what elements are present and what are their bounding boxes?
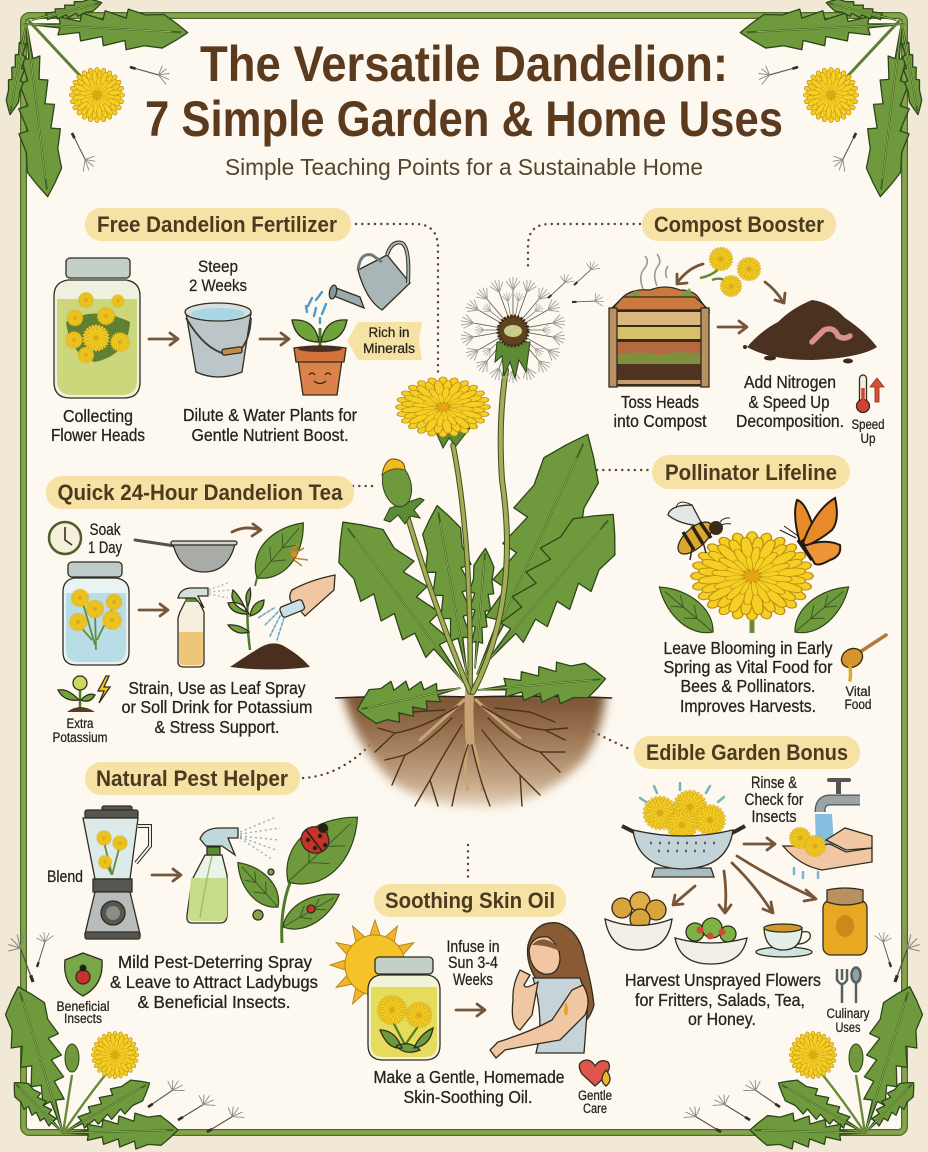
label: vital food: Vital — [846, 684, 870, 699]
heading pill: Pollinator Lifeline — [665, 460, 837, 485]
text: collecting — [51, 406, 145, 445]
icon: hand pouring — [258, 575, 335, 640]
icon: strainer — [135, 540, 237, 572]
icon: tea jar — [63, 562, 129, 665]
text: dilute: Gentle Nutrient Boost. — [192, 425, 348, 445]
arrow — [232, 524, 261, 536]
text: mild pest: & Beneficial Insects. — [138, 992, 290, 1012]
text: add nitrogen: & Speed Up — [748, 392, 830, 412]
icon: extra potassium — [58, 676, 110, 712]
icon: flower — [677, 522, 827, 630]
icon: oil jar — [368, 957, 440, 1060]
label: soak: Soak — [90, 521, 121, 539]
icon: watering can — [306, 242, 410, 323]
leaves — [316, 419, 639, 730]
label: extra potassium: Extra — [66, 716, 94, 731]
icon: hands with flowers — [783, 824, 872, 878]
text: dilute: Dilute & Water Plants for — [183, 405, 357, 425]
icon: heart with drop — [579, 1060, 610, 1086]
label: rinse: Insects — [752, 808, 796, 826]
label: infuse: Weeks — [453, 971, 493, 989]
arrow — [718, 321, 747, 333]
heading pill: Soothing Skin Oil — [385, 888, 555, 913]
icon: sun — [330, 920, 420, 1010]
text: add nitrogen: Decomposition. — [736, 411, 844, 431]
icon: spray bottle — [178, 582, 232, 667]
icon: leaf with bugs — [244, 512, 316, 589]
text: toss heads: into Compost — [614, 411, 707, 431]
text: add nitrogen — [736, 372, 844, 431]
title: 7 Simple Garden & Home Uses — [145, 91, 783, 147]
icon: thermometer — [856, 375, 884, 412]
icon: seedling in soil — [228, 588, 310, 670]
tag: rich in minerals: Rich in — [368, 325, 410, 340]
arrow — [456, 1004, 485, 1016]
icon: butterfly — [780, 498, 840, 564]
text: leave blooming: Leave Blooming in Early — [664, 638, 833, 658]
icon: leaves — [651, 577, 857, 642]
stems — [407, 370, 507, 692]
panel: natural pest helper — [47, 762, 374, 1026]
label: beneficial insects: Beneficial — [56, 999, 110, 1014]
label: gentle care — [578, 1088, 612, 1116]
text: leave blooming: Improves Harvests. — [680, 696, 816, 716]
heading pill: Free Dandelion Fertilizer — [97, 212, 337, 237]
arrow — [260, 333, 289, 345]
panel: edible garden bonus — [605, 736, 872, 1035]
icon: shield with ladybug — [65, 953, 102, 996]
arrow — [139, 604, 168, 616]
label: culinary uses: Uses — [836, 1020, 861, 1035]
label: rinse: Rinse & — [751, 774, 797, 792]
panel: pollinator lifeline — [651, 455, 886, 716]
text: add nitrogen: Add Nitrogen — [744, 372, 836, 392]
text: harvest: or Honey. — [688, 1009, 756, 1029]
icon: bucket — [185, 303, 251, 377]
icon: salad bowl — [675, 918, 747, 964]
corner: top right leaves and flower — [739, 0, 925, 199]
soil and roots — [335, 686, 612, 807]
text: harvest: Harvest Unsprayed Flowers — [625, 970, 821, 990]
label: infuse — [446, 938, 500, 989]
connectors — [303, 224, 650, 880]
label: steep — [189, 258, 247, 295]
text: leave blooming: Bees & Pollinators. — [680, 676, 816, 696]
icon: spray bottle — [187, 817, 280, 923]
label: soak — [88, 521, 123, 557]
heading pill: Edible Garden Bonus — [646, 740, 848, 765]
label: vital food — [844, 684, 872, 712]
icon: flower heads — [677, 244, 785, 303]
text: gentle oil: Make a Gentle, Homemade — [374, 1067, 564, 1087]
heading pill — [652, 455, 850, 489]
label: gentle care: Gentle — [578, 1088, 612, 1103]
icon: blender — [83, 806, 150, 939]
arrow — [149, 333, 178, 345]
corner: top left leaves and flower — [3, 0, 189, 199]
bud — [378, 459, 424, 524]
text: strain: & Stress Support. — [154, 717, 280, 737]
text: mild pest — [110, 952, 318, 1012]
panel: soothing skin oil — [330, 884, 612, 1116]
label: rinse — [744, 774, 804, 826]
title — [145, 36, 783, 147]
tag: rich in minerals: Minerals — [363, 341, 415, 356]
label: rinse: Check for — [744, 791, 804, 809]
text: collecting: Flower Heads — [51, 425, 145, 445]
text: strain — [122, 678, 312, 737]
text: leave blooming — [664, 638, 833, 716]
panel: compost booster — [548, 208, 884, 446]
label: extra potassium: Potassium — [52, 730, 108, 745]
seed head — [460, 277, 566, 383]
icon: honey dipper — [838, 635, 886, 680]
icon: floating seeds — [548, 259, 607, 320]
icon: soil mound with worm — [743, 300, 877, 364]
text: toss heads — [614, 392, 707, 431]
heading pill: Quick 24-Hour Dandelion Tea — [58, 480, 343, 505]
icon: clock — [49, 522, 81, 554]
text: harvest — [625, 970, 821, 1029]
corner: bottom left plant — [0, 929, 247, 1151]
arrows — [673, 838, 816, 913]
arrow — [152, 869, 181, 881]
text: leave blooming: Spring as Vital Food for — [664, 657, 833, 677]
label: culinary uses — [826, 1006, 870, 1035]
icon: fork and spoon — [837, 968, 860, 1003]
corner: bottom right plant — [681, 929, 928, 1151]
text: mild pest: Mild Pest-Deterring Spray — [118, 952, 312, 972]
label: gentle care: Care — [583, 1101, 607, 1116]
text: strain: Strain, Use as Leaf Spray — [128, 678, 306, 698]
label: infuse: Infuse in — [446, 938, 500, 956]
icon: leafy plant with ladybug — [229, 800, 374, 943]
label: beneficial insects: Insects — [64, 1011, 102, 1026]
label: infuse: Sun 3-4 — [448, 954, 498, 972]
panel: free dandelion fertilizer — [51, 208, 422, 445]
label: speed up — [852, 417, 884, 446]
label: speed up: Up — [860, 431, 876, 446]
icon: colander — [622, 783, 745, 877]
icon: faucet — [815, 778, 860, 845]
icon: fritters bowl — [605, 892, 672, 950]
label: blend: Blend — [47, 868, 83, 886]
central dandelion plant — [334, 277, 616, 812]
text: strain: or Soll Drink for Potassium — [122, 697, 312, 717]
label: extra potassium — [52, 716, 108, 745]
subtitle: Simple Teaching Points for a Sustainable Home — [225, 154, 703, 180]
label: culinary uses: Culinary — [826, 1006, 870, 1021]
label: steep: Steep — [198, 258, 238, 276]
text: gentle oil — [374, 1067, 564, 1107]
tag: rich in minerals — [347, 322, 422, 360]
icon: woman applying oil — [490, 923, 594, 1058]
heading pill: Natural Pest Helper — [96, 766, 288, 791]
label: steep: 2 Weeks — [189, 277, 247, 295]
icon: compost bin — [609, 254, 709, 387]
icon: potted seedling — [292, 320, 347, 395]
icon: jar of flowers — [54, 258, 140, 398]
icon: tea cup — [756, 924, 812, 957]
text: dilute — [183, 405, 357, 445]
label: soak: 1 Day — [88, 539, 123, 557]
label: speed up: Speed — [852, 417, 884, 432]
label: vital food: Food — [844, 697, 872, 712]
heading pill: Compost Booster — [654, 212, 824, 237]
text: harvest: for Fritters, Salads, Tea, — [635, 990, 805, 1010]
text: gentle oil: Skin-Soothing Oil. — [404, 1087, 532, 1107]
heading pill — [634, 736, 860, 769]
text: mild pest: & Leave to Attract Ladybugs — [110, 972, 318, 992]
label: beneficial insects — [56, 999, 110, 1026]
text: collecting: Collecting — [63, 406, 133, 426]
text: toss heads: Toss Heads — [621, 392, 699, 412]
icon: honey jar — [823, 888, 867, 955]
title: The Versatile Dandelion: — [200, 36, 728, 92]
panel: quick tea — [46, 476, 354, 745]
open flower — [385, 370, 501, 448]
icon: bee — [668, 502, 731, 560]
